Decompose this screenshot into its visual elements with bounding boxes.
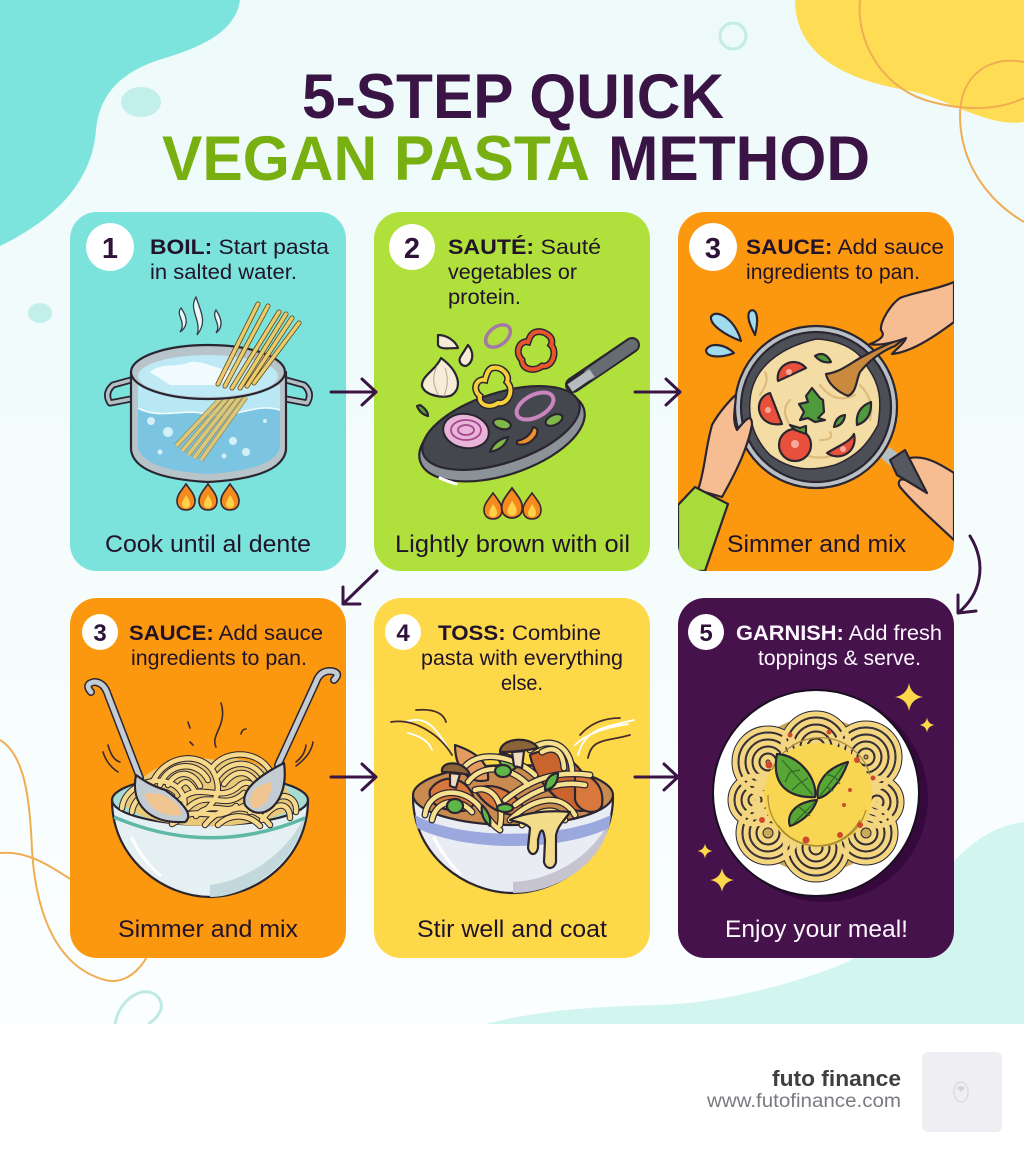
step number 5 [688,614,724,650]
heading: saute: protein. [448,286,521,309]
heading: toss: TOSS: Combine [438,622,601,645]
icon: pot of boiling water with pasta [108,304,309,482]
heading: garnish: GARNISH: Add fresh [736,622,942,645]
heading: saute: vegetables or [448,261,577,284]
sub-icon: left ladle [88,682,188,822]
heading: toss: else. [501,672,543,695]
heading: boil [150,236,329,284]
icon: mixing bowl with pasta [413,740,613,893]
brand name: futo finance [772,1066,901,1091]
panel: step 3 sauce in bowl [70,598,346,958]
arrow: step 2 to 3 [635,379,680,405]
icon: frying pan with vegetables [408,320,632,500]
heading: saute: SAUTÉ: Sauté [448,236,601,259]
sub-icon: bottom right hand [899,457,954,540]
icon: flames [484,488,541,519]
title: METHOD [608,124,870,194]
heading: sauce: SAUCE: Add sauce [746,236,944,259]
sub-icon: greens [447,765,558,826]
arrow: sauce to toss [331,764,376,790]
heading: garnish [736,622,942,670]
panel: step 5 garnish [678,598,954,958]
sub-icon: red onion slice [440,410,492,452]
panel: step 1 boil [70,212,346,571]
icon: flames [177,484,239,510]
caption: Stir well and coat [417,916,607,943]
step number 3 [689,223,737,271]
sub-icon: stir-fry pieces [430,745,602,815]
sub-icon: herbs [799,354,871,427]
step number 3 [82,614,118,650]
sub-icon: right ladle [244,671,337,813]
arrow: step 3 curving down to garnish [958,536,980,613]
heading: boil: BOIL: Start pasta [150,236,329,259]
panel: step 3 sauce in pan [678,212,954,571]
caption: Simmer and mix [118,916,298,943]
sub-icon: left hand with sleeve [698,395,752,497]
heading: sauce [746,236,944,284]
caption: Lightly brown with oil [395,531,630,558]
step number 2: 2 [404,233,420,265]
heading: sauce [129,622,323,670]
footer [0,1024,1024,1154]
sub-icon: sliced vegetables [490,412,564,452]
arrow: step 1 to 2 [331,379,376,405]
icon: motion lines [391,710,634,758]
heading: saute [448,236,601,309]
sub-icon: sauce drip [510,811,570,868]
panel: step 2 saute [374,212,650,571]
title [162,62,870,194]
step number 2 [389,224,435,270]
sub-icon: tomatoes [759,362,855,461]
heading: sauce: SAUCE: Add sauce [129,622,323,645]
step number 1 [86,223,134,271]
panel: step 4 toss [374,598,650,958]
title: 5-STEP QUICK [302,62,724,132]
step number 3: 3 [705,233,721,265]
sub-icon: pan handle [885,450,927,493]
icon: bowl of noodles with ladles [88,671,337,897]
caption: Cook until al dente [105,531,311,558]
step number 4: 4 [396,620,410,647]
caption: Enjoy your meal! [725,916,908,943]
title: VEGAN PASTA [162,124,590,194]
icon: steam marks [103,703,313,772]
icon: plate of spaghetti with basil [713,690,928,902]
caption: Simmer and mix [727,531,906,558]
icon: water drops [706,310,757,356]
step number 3: 3 [93,620,107,647]
sub-icon: top hand [870,282,954,354]
icon: sparkles [698,683,934,892]
sub-icon: wooden spoon [826,338,905,396]
arrow: step 2 down to sauce bowl [343,571,377,604]
heading: garnish: toppings & serve. [758,647,921,670]
heading: boil: in salted water. [150,261,297,284]
arrow: toss to garnish [635,764,678,790]
website: www.futofinance.com [706,1090,901,1112]
sub-icon: onion ring [512,387,558,425]
step number 4 [385,614,421,650]
heading: sauce: ingredients to pan. [746,261,920,284]
heading: toss [421,622,623,695]
logo placeholder [922,1052,1002,1132]
sub-icon: flying vegetables and garlic [417,335,472,416]
heading: toss: pasta with everything [421,647,623,670]
step number 5: 5 [699,620,713,647]
icon: sauce pan with hands [678,282,954,571]
sub-icon: basil leaves [776,754,848,826]
sub-icon: chili flakes [759,730,876,844]
sub-icon: mushrooms [442,740,538,788]
heading: sauce: ingredients to pan. [131,647,307,670]
step number 1: 1 [102,233,118,265]
icon: steam [179,297,221,335]
